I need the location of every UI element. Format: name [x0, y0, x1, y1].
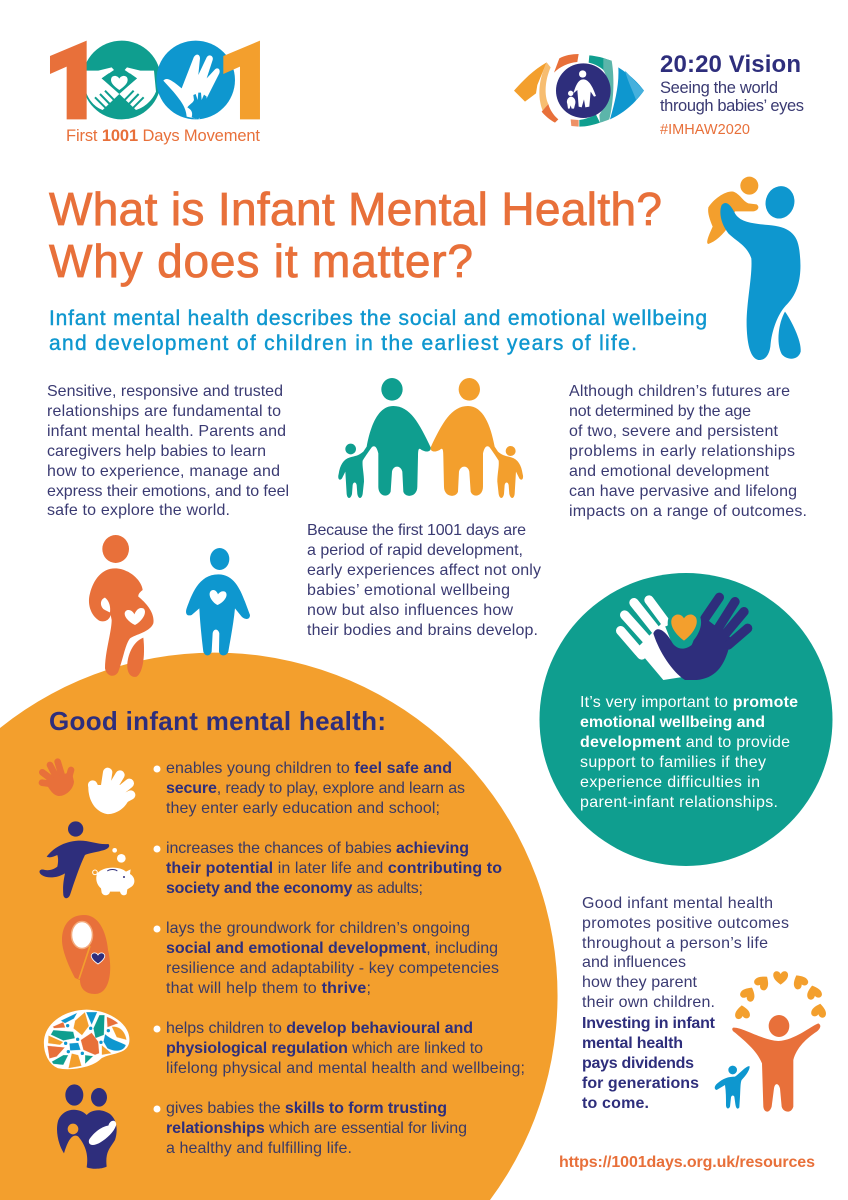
logo: First 1001 Days Movement — [50, 41, 260, 145]
logo: First 1001 Days Movement: First 1001 Days Movement — [66, 127, 260, 145]
title — [49, 183, 662, 287]
text: relationships: infant mental health. Parents and — [47, 423, 286, 440]
list: benefits — [154, 760, 525, 1157]
list: benefits: they enter early education and school; — [166, 800, 440, 817]
text: relationships: how to experience, manage and — [47, 463, 280, 480]
heading: good infant mental health: Good infant mental health: — [49, 706, 386, 736]
text: relationships: relationships are fundamental to — [47, 403, 281, 420]
list: benefits: lays the groundwork for children’s ongoing — [166, 920, 470, 937]
text: good outcomes: for generations — [582, 1075, 699, 1092]
text: promote emotional wellbeing: support to families if they — [580, 754, 766, 771]
text: good outcomes: how they parent — [582, 974, 698, 991]
icon: brain map — [45, 1011, 128, 1068]
list: benefits: their potential in later life and contributing to — [166, 860, 502, 877]
text: lifelong impacts: of two, severe and persistent — [569, 423, 779, 440]
icon: parents and baby — [57, 1084, 117, 1169]
list: benefits: helps children to develop behavioural and — [166, 1020, 473, 1037]
20:20 Vision caption: Seeing the world — [660, 79, 778, 97]
text: rapid development — [307, 522, 541, 639]
list: benefits: that will help them to thrive; — [166, 980, 371, 997]
text: good outcomes: mental health — [582, 1035, 683, 1052]
text: good outcomes — [582, 895, 789, 1112]
list: benefits: physiological regulation which are linked to — [166, 1040, 483, 1057]
title: What is Infant Mental Health? — [49, 183, 662, 235]
text: relationships: caregivers help babies to learn — [47, 443, 266, 460]
text: promote emotional wellbeing: parent-infant relationships. — [580, 794, 778, 811]
text: relationships: express their emotions, and to feel — [47, 483, 289, 500]
icon: runner and piggy bank — [39, 821, 134, 898]
text: rapid development: babies’ emotional wellbeing — [307, 582, 510, 599]
20:20 Vision caption: 20:20 Vision — [660, 51, 801, 78]
list: benefits: increases the chances of babies achieving — [166, 840, 469, 857]
text: promote emotional wellbeing: development and to provide — [580, 734, 790, 751]
text: lifelong impacts: and emotional development — [569, 463, 770, 480]
link: resources URL: https://1001days.org.uk/resources — [559, 1154, 815, 1171]
text: lifelong impacts: impacts on a range of outcomes. — [569, 503, 807, 520]
text: rapid development: a period of rapid development, — [307, 542, 523, 559]
list: benefits: social and emotional development, including — [166, 940, 498, 957]
text: rapid development: their bodies and brains develop. — [307, 622, 538, 639]
text: good outcomes: promotes positive outcomes — [582, 915, 789, 932]
icon: adult lifting baby — [707, 177, 801, 360]
icon: two hands and heart — [621, 597, 748, 680]
text: good outcomes: to come. — [582, 1095, 649, 1112]
list: benefits: a healthy and fulfilling life. — [166, 1140, 352, 1157]
list: benefits: lifelong physical and mental health and wellbeing; — [166, 1060, 525, 1077]
subtitle — [49, 307, 707, 355]
text: rapid development: early experiences affect not only — [307, 562, 541, 579]
text: lifelong impacts: problems in early relationships — [569, 443, 795, 460]
text: good outcomes: Investing in infant — [582, 1015, 716, 1032]
text: good outcomes: and influences — [582, 954, 686, 971]
text: promote emotional wellbeing: experience difficulties in — [580, 774, 760, 791]
text: good outcomes: pays dividends — [582, 1055, 694, 1072]
text: lifelong impacts: Although children’s futures are — [569, 383, 790, 400]
text: promote emotional wellbeing: emotional wellbeing and — [580, 714, 765, 731]
text: promote emotional wellbeing — [580, 694, 798, 811]
20:20 Vision caption: through babies’ eyes — [660, 97, 804, 115]
20:20 Vision caption: #IMHAW2020 — [660, 122, 750, 138]
list: benefits: society and the economy as adults; — [166, 880, 423, 897]
list: benefits: resilience and adaptability - key competencies — [166, 960, 499, 977]
list: benefits: enables young children to feel safe and — [166, 760, 452, 777]
text: promote emotional wellbeing: It’s very important to promote — [580, 694, 798, 711]
panel: orange good infant mental health — [0, 653, 558, 1200]
panel: teal promote wellbeing — [540, 573, 832, 866]
icon: pregnant woman and child — [89, 535, 250, 677]
text: rapid development: Because the first 1001 days are — [307, 522, 526, 539]
list: benefits: secure, ready to play, explore and learn as — [166, 780, 465, 797]
text: relationships: Sensitive, responsive and trusted — [47, 383, 283, 400]
logo: 20:20 Vision eye — [514, 54, 644, 127]
icon: adult and child with hearts — [715, 971, 828, 1112]
text: rapid development: now but also influences how — [307, 602, 513, 619]
icon: family holding hands — [338, 378, 523, 498]
text: good outcomes: Good infant mental health — [582, 895, 773, 912]
subtitle: Infant mental health describes the social and emotional wellbeing — [49, 307, 707, 330]
list: benefits: relationships which are essential for living — [166, 1120, 467, 1137]
text: relationships — [47, 383, 289, 519]
text: good outcomes: throughout a person’s life — [582, 935, 768, 952]
text: lifelong impacts: not determined by the age — [569, 403, 751, 420]
title: Why does it matter? — [49, 235, 473, 287]
subtitle: and development of children in the earliest years of life. — [49, 332, 637, 355]
icon: location pin with heart — [62, 915, 110, 994]
text: relationships: safe to explore the world. — [47, 502, 230, 519]
text: good outcomes: their own children. — [582, 994, 715, 1011]
20:20 Vision caption — [660, 51, 804, 138]
text: lifelong impacts — [569, 383, 807, 520]
list: benefits: gives babies the skills to form trusting — [166, 1100, 447, 1117]
icon: two hands — [42, 762, 131, 814]
text: lifelong impacts: can have pervasive and lifelong — [569, 483, 797, 500]
